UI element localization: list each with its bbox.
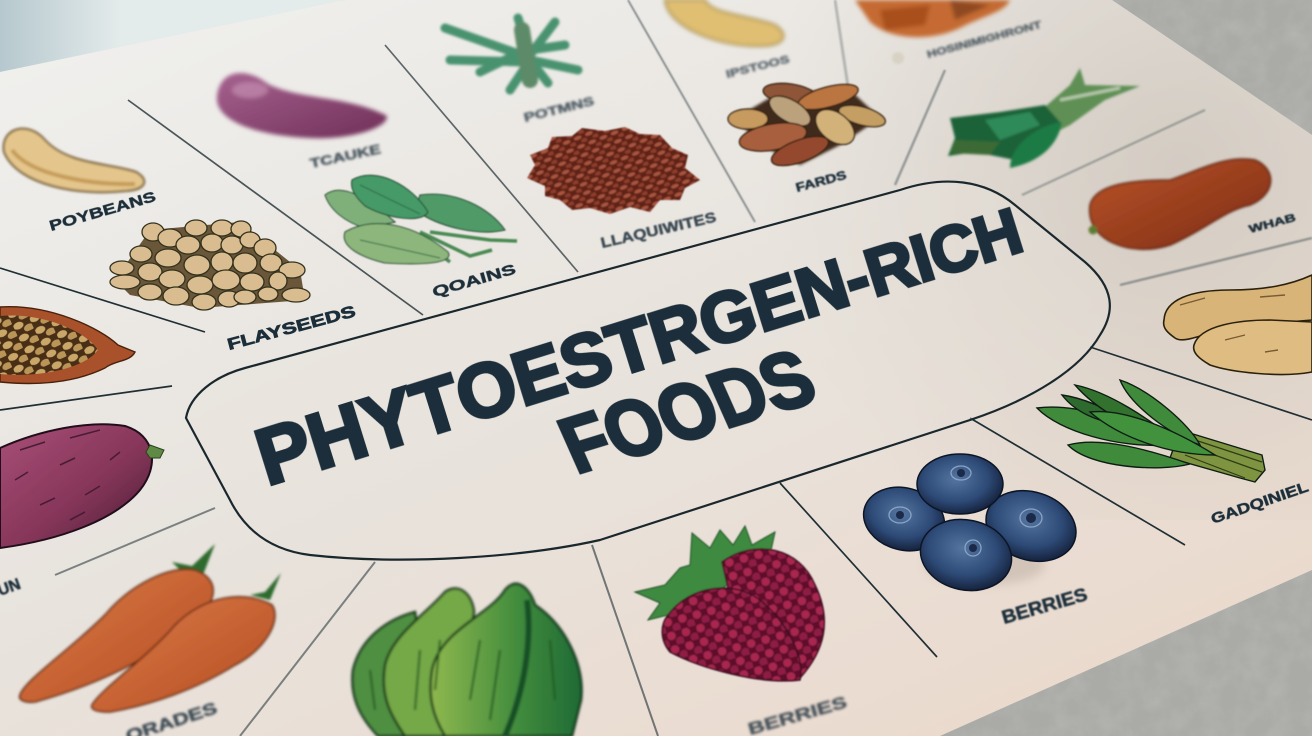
label: llaquimites: LLAQUIWITES	[599, 209, 718, 252]
food: herb sprig top	[445, 18, 578, 90]
label: qoains: QOAINS	[430, 261, 518, 301]
label: gadqiniel: GADQINIEL	[1209, 479, 1311, 528]
food: cashew bean	[4, 129, 144, 192]
label: fards: FARDS	[794, 168, 848, 195]
label: flayseeds: FLAYSEEDS	[226, 303, 358, 354]
label: berries right: BERRIES	[1000, 584, 1090, 628]
food: nuts	[728, 79, 888, 172]
food: sweet potato top	[217, 73, 387, 138]
food: blueberries	[856, 454, 1085, 599]
food: orange top	[855, 0, 1010, 37]
title panel	[186, 181, 1110, 560]
food: potatoes right	[1164, 275, 1312, 374]
food: carrots	[20, 544, 281, 712]
title second line: FOODS	[547, 333, 828, 491]
title heading: PHYTOESTRGEN-RICH	[246, 181, 1031, 502]
label: blurred top right: HOSINIMIGHRONT	[926, 20, 1043, 61]
label: blurred top: IPSTOOS	[725, 54, 791, 81]
label: potato blurred: POTMNS	[522, 94, 596, 125]
food: squash	[1088, 159, 1271, 249]
label: tcauke: TCAUKE	[309, 141, 382, 171]
small paper speck	[892, 52, 904, 64]
food: soybean pile	[110, 220, 310, 310]
food: leafy greens bunch	[948, 68, 1140, 168]
food: raspberry	[635, 526, 824, 681]
food: purple sweet potato left	[0, 424, 164, 548]
label: poybeans: POYBEANS	[47, 188, 158, 235]
food: green melon	[352, 584, 582, 736]
food: red seed pile	[527, 127, 700, 214]
label: whab: WHAB	[1248, 212, 1297, 236]
food: green herb bundle	[1037, 380, 1265, 482]
food: yellow bean top	[665, 0, 783, 46]
food: seed pod	[0, 307, 135, 384]
food: spinach leaves	[325, 175, 517, 264]
